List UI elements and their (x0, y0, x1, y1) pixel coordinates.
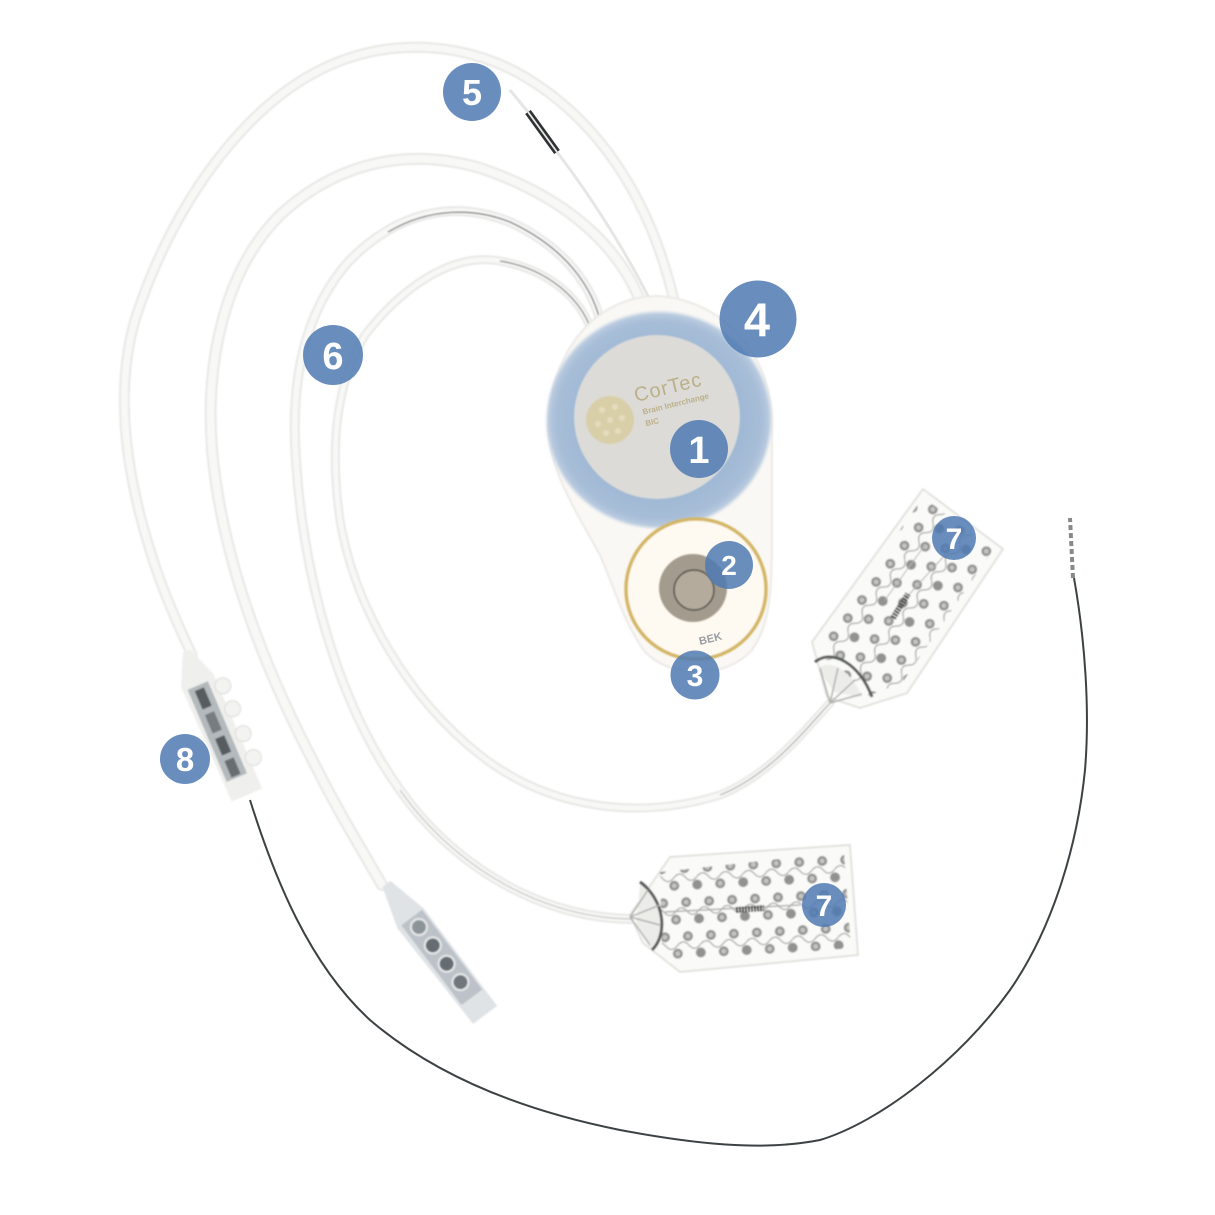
badge 3 (670, 650, 720, 700)
coil lead with black tip (label 5) (510, 90, 650, 300)
badge 5 (443, 63, 501, 121)
badge 4 (720, 280, 796, 358)
black wire: long reference lead (250, 518, 1087, 1146)
logo text: BIC (644, 416, 660, 428)
blue ring: titanium casing (547, 312, 771, 528)
badge 8 (160, 734, 210, 784)
badge 4: 4 (744, 293, 770, 346)
logo text: CorTec (632, 369, 705, 407)
cable: lead to lower electrode grid (295, 211, 632, 919)
serial mark: BEK (698, 631, 723, 648)
badge 7 upper grid: 7 (946, 523, 962, 556)
lower electrode grid (630, 845, 858, 972)
badge 6 (303, 325, 363, 385)
badge 3: 3 (687, 660, 703, 693)
badge 2 (705, 541, 753, 589)
housing: translucent teardrop body (548, 296, 772, 672)
badge 7 upper grid (932, 516, 976, 560)
badge 7 lower grid: 7 (816, 890, 832, 923)
round magnet (659, 554, 727, 622)
upper electrode grid (812, 489, 1003, 708)
cable: second lead to lower connector (211, 159, 640, 885)
connector left (label 8) (169, 640, 273, 802)
badge 2: 2 (721, 550, 737, 581)
badge 1: 1 (688, 430, 710, 472)
gold coil ring (626, 519, 766, 659)
logo mark (586, 396, 634, 444)
badge 8: 8 (176, 741, 194, 778)
badge 5: 5 (462, 72, 482, 113)
badge 7 lower grid (802, 883, 846, 927)
badge 6: 6 (322, 336, 344, 378)
logo text (632, 368, 713, 429)
logo text: Brain Interchange (642, 391, 710, 417)
badge 1 (670, 420, 728, 478)
cable: outer lead to connector 8 (124, 47, 675, 655)
cable: lead to upper electrode grid (335, 260, 830, 808)
connector lower (372, 875, 497, 1026)
central disc with logo (574, 335, 740, 499)
implant housing (547, 296, 772, 672)
